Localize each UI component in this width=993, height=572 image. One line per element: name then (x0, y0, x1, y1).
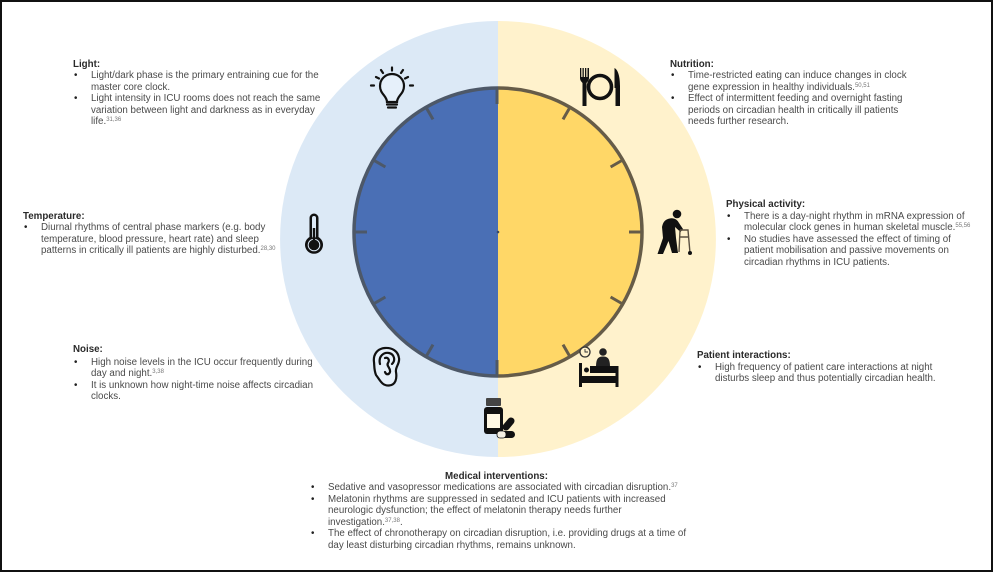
text: noise: It is unknown how night-time noise affects circadian (91, 380, 313, 391)
text: medical interventions: day least disturbing circadian rhythms, remains unknown. (328, 540, 576, 551)
text: physical activity: There is a day-night rhythm in mRNA expression of (744, 211, 965, 222)
icon: plate and cutlery (580, 68, 620, 106)
clock face: day half (498, 88, 642, 376)
clock rim and ticks: night half (354, 88, 498, 376)
text: patient interactions: Patient interactions: (697, 350, 791, 361)
text: physical activity: circadian rhythms in ICU patients. (744, 257, 890, 268)
text: physical activity (726, 199, 970, 268)
text: physical activity: No studies have assessed the effect of timing of (744, 234, 951, 245)
icon: person with walker (658, 210, 692, 255)
outer circle: day half (498, 21, 716, 457)
text: nutrition: Nutrition: (670, 58, 714, 70)
text: nutrition (670, 58, 907, 127)
center mark (497, 231, 499, 233)
text: patient interactions: disturbs sleep and thus potentially circadian health. (715, 373, 936, 384)
text: medical interventions: Medical interventions: (445, 470, 548, 482)
text: light: life.31,36 (91, 116, 121, 127)
text: medical interventions: investigation.37,38. (328, 517, 403, 528)
text: light: Light intensity in ICU rooms does not reach the same (91, 93, 320, 104)
clock face: night half (354, 88, 498, 376)
text: temperature: Temperature: (23, 210, 85, 222)
text: noise: day and night.3,38 (91, 368, 164, 379)
text: noise: Noise: (73, 344, 103, 355)
clock rim and ticks: day half (498, 88, 642, 376)
text: patient interactions: High frequency of patient care interactions at night (715, 362, 932, 373)
text: medical interventions: Sedative and vasopressor medications are associated with circadian disruption.37 (328, 482, 678, 493)
text: light: Light/dark phase is the primary entraining cue for the (91, 70, 319, 81)
text: light: master core clock. (91, 82, 170, 93)
icon: medication bottle and pills (484, 398, 515, 438)
icon: ear (374, 348, 399, 386)
text: nutrition: Time-restricted eating can induce changes in clock (688, 70, 907, 81)
text: physical activity: molecular clock genes in human skeletal muscle.55,56 (744, 222, 970, 233)
text: temperature: patterns in critically ill patients are highly disturbed.28,30 (41, 245, 276, 256)
text: medical interventions (311, 470, 686, 551)
text: nutrition: needs further research. (688, 116, 789, 127)
text: nutrition: periods on circadian health in critically ill patients (688, 105, 898, 116)
icon: light bulb (371, 68, 413, 108)
outer circle: night half (280, 21, 498, 457)
text: physical activity: Physical activity: (726, 199, 805, 210)
text: noise (73, 344, 313, 402)
text: patient interactions (697, 350, 936, 384)
text: noise: High noise levels in the ICU occur frequently during (91, 357, 313, 368)
icon: thermometer (305, 214, 323, 254)
icon: patient in bed with nurse and clock (579, 347, 618, 387)
text: light (73, 58, 320, 127)
text: nutrition: Effect of intermittent feeding and overnight fasting (688, 93, 902, 104)
text: medical interventions: Melatonin rhythms are suppressed in sedated and ICU patients with increased (328, 494, 666, 505)
text: noise: clocks. (91, 391, 121, 402)
text: temperature: temperature, blood pressure, heart rate) and sleep (41, 234, 259, 245)
text: light: variation between light and darkness as in everyday (91, 105, 315, 116)
text: medical interventions: The effect of chronotherapy on circadian disruption, i.e. providing drugs at a time of (328, 528, 686, 539)
text: medical interventions: neurologic dysfunction; the effect of melatonin therapy needs further (328, 505, 622, 516)
text: physical activity: patient mobilisation and passive movements on (744, 245, 949, 256)
text: light: Light: (73, 58, 100, 70)
text: temperature: Diurnal rhythms of central phase markers (e.g. body (41, 222, 265, 233)
text: temperature (23, 210, 276, 256)
text: nutrition: gene expression in healthy individuals.50,51 (688, 82, 870, 93)
